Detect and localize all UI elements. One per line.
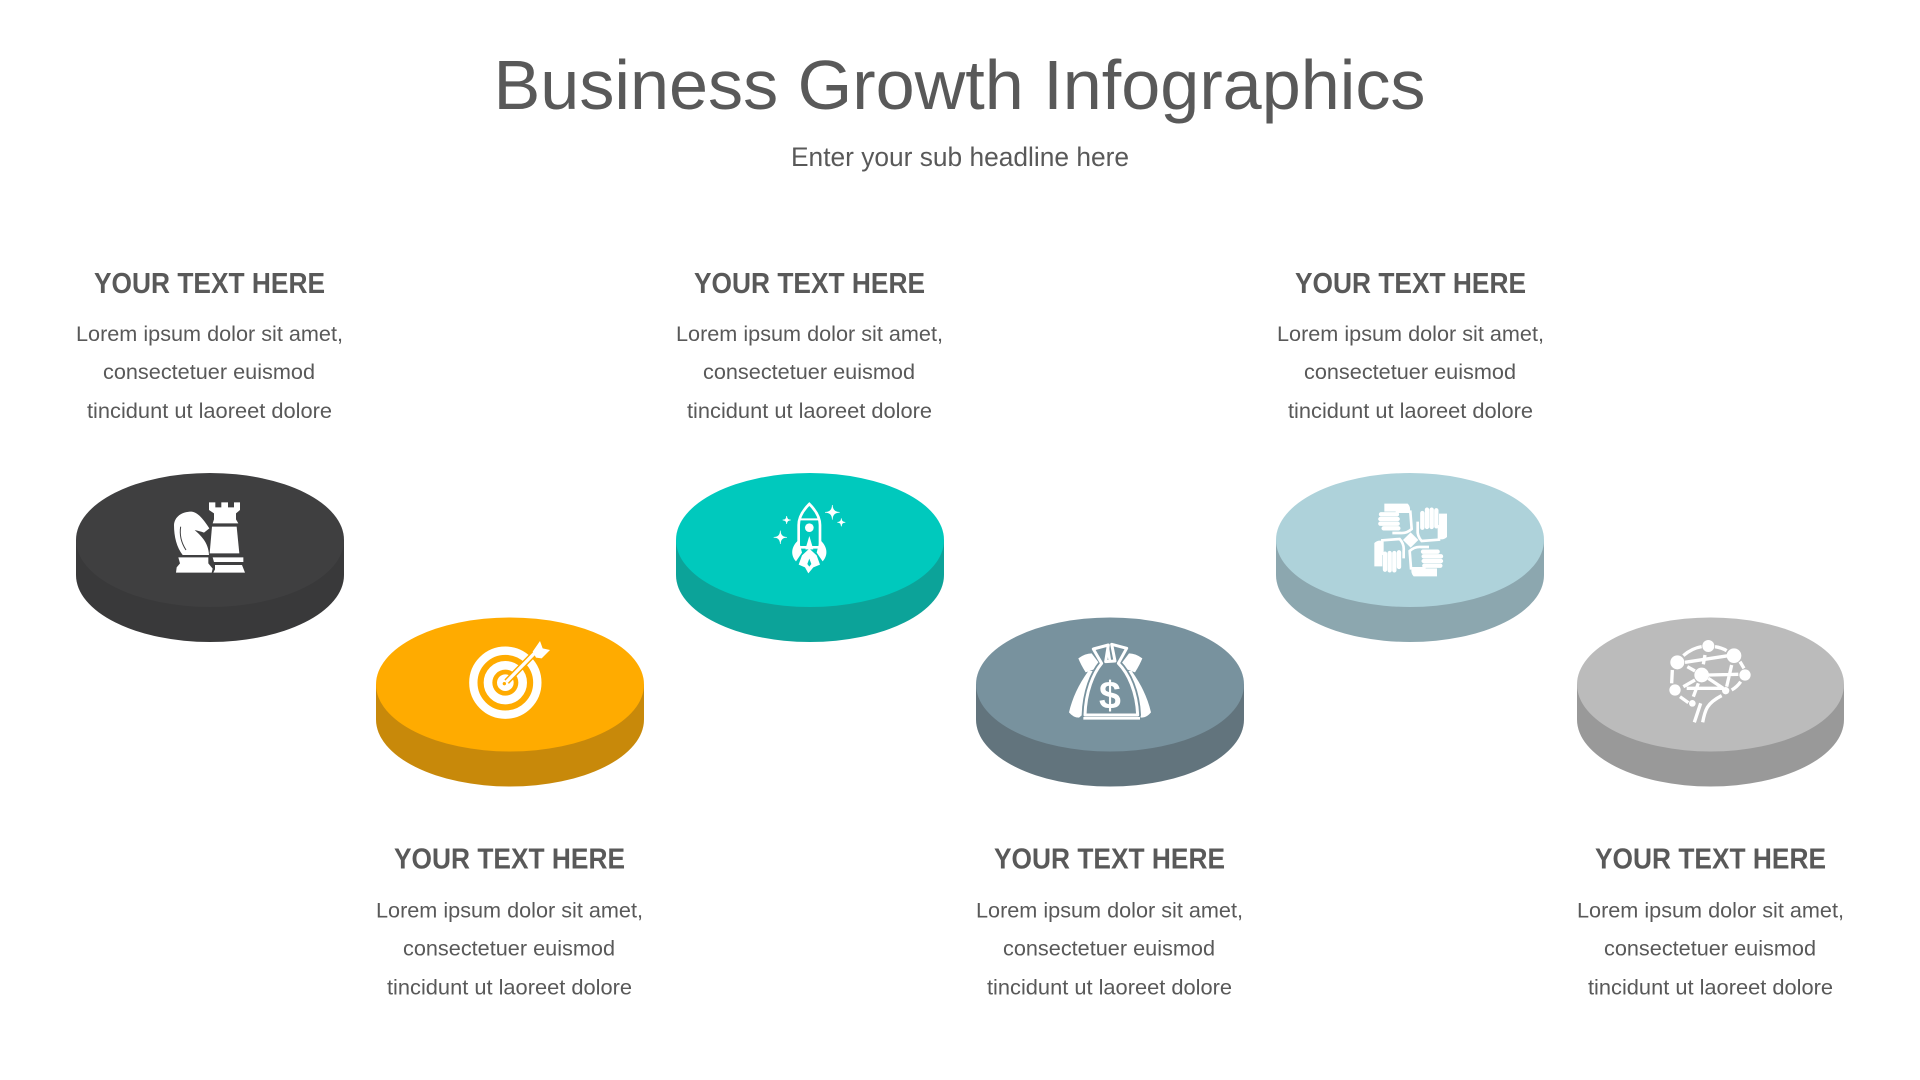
- icon: brain network: [1669, 640, 1751, 722]
- panel: step 5 text: [1277, 268, 1544, 423]
- body text: tincidunt ut laoreet dolore: [387, 976, 632, 1000]
- body text: consectetuer euismod: [103, 361, 315, 384]
- heading: YOUR TEXT HERE: [1295, 268, 1526, 300]
- body text: Lorem ipsum dolor sit amet,: [1277, 323, 1544, 346]
- heading: YOUR TEXT HERE: [994, 844, 1225, 876]
- body text: tincidunt ut laoreet dolore: [1288, 400, 1533, 423]
- body text: consectetuer euismod: [1604, 938, 1816, 960]
- disc 4: slate with money bag icon: [976, 618, 1244, 786]
- icon: four joined hands: [1374, 504, 1447, 576]
- heading: YOUR TEXT HERE: [94, 268, 325, 300]
- disc 5: light blue with hands icon: [1276, 473, 1544, 642]
- body text: tincidunt ut laoreet dolore: [987, 976, 1232, 1000]
- heading: YOUR TEXT HERE: [1595, 844, 1826, 876]
- panel: step 2 text: [376, 844, 643, 1000]
- icon: target with arrow: [473, 641, 550, 715]
- body text: [976, 900, 1243, 1000]
- panel: step 6 text: [1577, 844, 1844, 1000]
- heading: YOUR TEXT HERE: [694, 268, 925, 300]
- disc 2: orange with target icon: [376, 618, 644, 786]
- body text: tincidunt ut laoreet dolore: [87, 400, 332, 423]
- icon: chess knight and rook: [174, 502, 245, 573]
- heading: YOUR TEXT HERE: [394, 844, 625, 876]
- icon: rocket with sparkles: [774, 504, 845, 573]
- body text: consectetuer euismod: [1304, 361, 1516, 384]
- icon: money bag: $: [1099, 674, 1121, 718]
- body text: Lorem ipsum dolor sit amet,: [976, 900, 1243, 922]
- body text: Lorem ipsum dolor sit amet,: [1577, 900, 1844, 922]
- disc 3: teal with rocket icon: [676, 473, 944, 642]
- title: Business Growth Infographics: [494, 46, 1426, 124]
- body text: [376, 900, 643, 1000]
- body text: Lorem ipsum dolor sit amet,: [376, 900, 643, 922]
- icon: money bag: [1069, 644, 1151, 718]
- body text: tincidunt ut laoreet dolore: [1588, 976, 1833, 1000]
- body text: consectetuer euismod: [1003, 938, 1215, 960]
- body text: tincidunt ut laoreet dolore: [687, 400, 932, 423]
- body text: [1277, 323, 1544, 423]
- body text: Lorem ipsum dolor sit amet,: [76, 323, 343, 346]
- body text: Lorem ipsum dolor sit amet,: [676, 323, 943, 346]
- body text: [676, 323, 943, 423]
- body text: [76, 323, 343, 423]
- body text: [1577, 900, 1844, 1000]
- panel: step 1 text: [76, 268, 343, 423]
- body text: consectetuer euismod: [403, 938, 615, 960]
- panel: step 3 text: [676, 268, 943, 423]
- disc 1: dark with chess icon: [76, 473, 344, 642]
- body text: consectetuer euismod: [703, 361, 915, 384]
- panel: step 4 text: [976, 844, 1243, 1000]
- subtitle: Enter your sub headline here: [791, 142, 1129, 172]
- disc 6: grey with brain network icon: [1577, 618, 1844, 786]
